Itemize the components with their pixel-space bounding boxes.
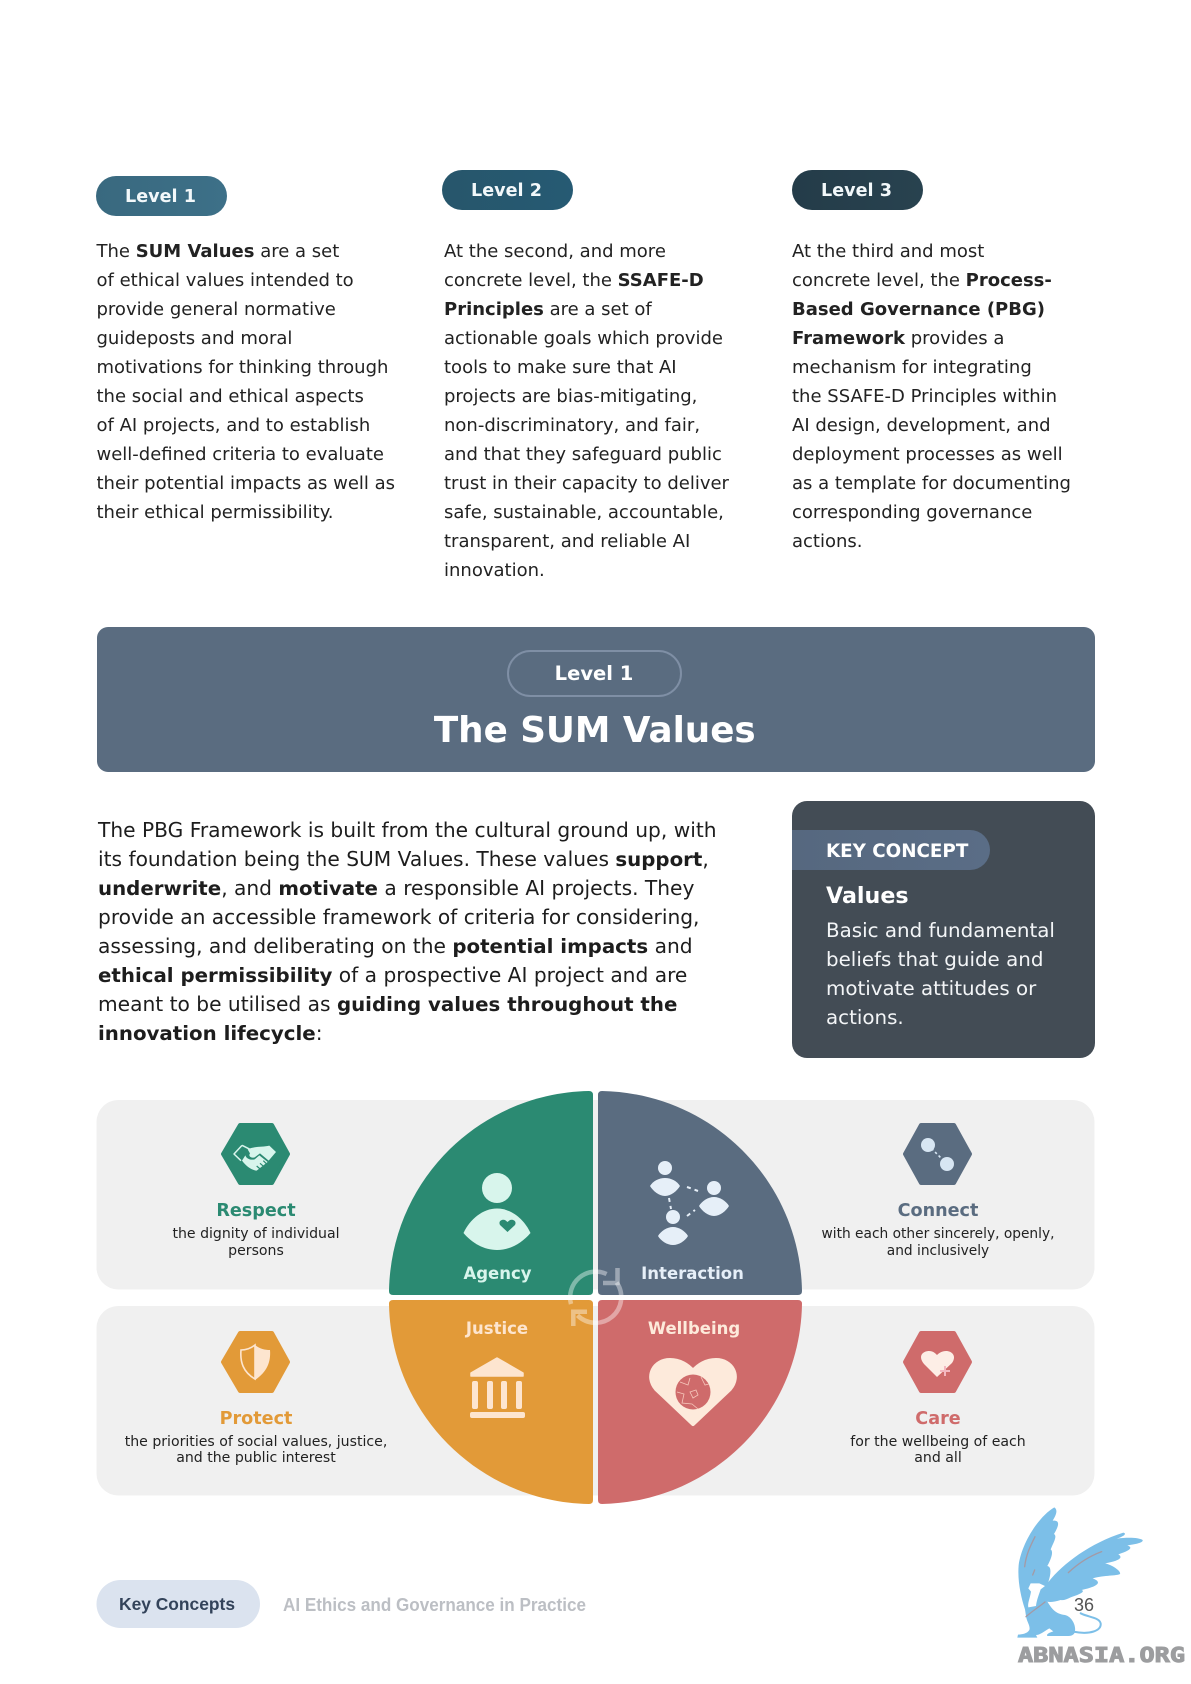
text: Level 1 description: of AI projects, and to establish — [96, 415, 370, 436]
intro paragraph: The PBG Framework is built from the cultural ground up, with — [98, 818, 717, 842]
intro paragraph: ethical permissibility of a prospective AI project and are — [98, 963, 687, 987]
pill: Level 2: Level 2 — [471, 181, 542, 201]
icon: heart with globe — [651, 1360, 735, 1424]
icon: person with heart — [464, 1173, 530, 1250]
text: Level 2 description: innovation. — [444, 560, 545, 581]
key concept definition: Basic and fundamental — [826, 919, 1055, 942]
description: Connect: with each other sincerely, openly, — [822, 1226, 1054, 1242]
quadrant: Interaction — [598, 1091, 802, 1295]
pill: Level 1 — [96, 176, 227, 216]
quadrant: Justice — [389, 1300, 593, 1504]
intro paragraph: meant to be utilised as guiding values throughout the — [98, 992, 677, 1016]
text: Level 2 description — [444, 241, 729, 581]
banner title: The SUM Values — [434, 710, 756, 751]
label: Respect: Respect — [216, 1201, 296, 1221]
footer title: AI Ethics and Governance in Practice — [283, 1594, 586, 1615]
label: Connect: Connect — [898, 1201, 978, 1221]
key concept tag: KEY CONCEPT — [826, 841, 968, 862]
label: Care: Care — [915, 1409, 961, 1429]
intro paragraph: assessing, and deliberating on the potential impacts and — [98, 934, 693, 958]
text: Level 1 description: well-defined criteria to evaluate — [96, 444, 384, 465]
text: Level 1 description: of ethical values intended to — [96, 270, 354, 291]
text: Level 3 description: as a template for documenting — [792, 473, 1071, 494]
text: Level 1 description: motivations for thinking through — [96, 357, 388, 378]
quadrant: Wellbeing — [598, 1300, 802, 1504]
intro paragraph: provide an accessible framework of criteria for considering, — [98, 905, 699, 929]
label: Protect: Protect — [220, 1409, 292, 1429]
intro paragraph: its foundation being the SUM Values. These values support, — [98, 847, 709, 871]
label: Wellbeing: Wellbeing — [648, 1319, 740, 1338]
intro paragraph: underwrite, and motivate a responsible AI projects. They — [98, 876, 694, 900]
intro paragraph — [98, 818, 717, 1045]
text: Level 2 description: and that they safeguard public — [444, 444, 722, 465]
text: Level 2 description: tools to make sure that AI — [444, 357, 677, 378]
text: Level 3 description: mechanism for integrating — [792, 357, 1032, 378]
description: Care: and all — [914, 1450, 962, 1466]
pill: Level 2 — [442, 170, 573, 210]
label: Justice: Justice — [465, 1319, 528, 1338]
footer pill: Key Concepts: Key Concepts — [119, 1594, 235, 1614]
key concept definition: actions. — [826, 1006, 904, 1029]
logo text: ABNASIA.ORG — [1018, 1643, 1185, 1667]
text: Level 2 description: transparent, and reliable AI — [444, 531, 690, 552]
page number: 36 — [1074, 1595, 1094, 1615]
banner: The SUM Values — [96, 627, 1095, 772]
key concept definition — [826, 919, 1055, 1029]
description: Protect: the priorities of social values, justice, — [125, 1434, 387, 1450]
text: Level 3 description: corresponding governance — [792, 502, 1032, 523]
key concept definition: beliefs that guide and — [826, 948, 1043, 971]
icon: handshake hexagon — [223, 1125, 288, 1183]
pill: Level 3 — [792, 170, 923, 210]
logo: griffin watermark — [1017, 1507, 1143, 1638]
text: Level 2 description: safe, sustainable, accountable, — [444, 502, 724, 523]
text: Level 2 description: non-discriminatory, and fair, — [444, 415, 700, 436]
value: Respect — [172, 1125, 340, 1259]
text: Level 1 description — [96, 241, 395, 523]
text: Level 2 description: Principles are a set of — [444, 299, 652, 320]
key concept tag — [792, 830, 990, 870]
text: Level 3 description: At the third and most — [792, 241, 984, 262]
key concept heading: Values — [826, 883, 909, 909]
text: Level 2 description: projects are bias-mitigating, — [444, 386, 697, 407]
text: Level 1 description: The SUM Values are a set — [96, 241, 339, 262]
intro paragraph: innovation lifecycle: — [98, 1021, 323, 1045]
icon: institution building — [470, 1358, 525, 1418]
text: Level 3 description: Framework provides a — [792, 328, 1004, 349]
text: Level 3 description: Based Governance (PBG) — [792, 299, 1045, 320]
description: Connect: and inclusively — [887, 1243, 989, 1259]
footer pill: Key Concepts — [96, 1580, 260, 1628]
label: Interaction: Interaction — [641, 1264, 744, 1283]
icon: connected nodes hexagon — [905, 1125, 970, 1183]
value: Care — [850, 1333, 1026, 1466]
icon: heart hexagon — [905, 1333, 970, 1391]
text: Level 2 description: actionable goals which provide — [444, 328, 723, 349]
icon: cycle arrows — [570, 1268, 621, 1326]
icon: shield hexagon — [223, 1333, 288, 1391]
text: Level 2 description: trust in their capacity to deliver — [444, 473, 729, 494]
description: Care: for the wellbeing of each — [850, 1434, 1026, 1450]
text: Level 1 description: their potential impacts as well as — [96, 473, 395, 494]
quadrant: Agency — [389, 1091, 593, 1295]
value: Protect — [125, 1333, 387, 1466]
key concept panel — [792, 801, 1095, 1058]
text: Level 3 description: concrete level, the Process- — [792, 270, 1052, 291]
key concept definition: motivate attitudes or — [826, 977, 1036, 1000]
text: Level 3 description: AI design, development, and — [792, 415, 1051, 436]
banner pill: Level 1 — [506, 650, 682, 697]
pill: Level 1: Level 1 — [125, 187, 196, 207]
pill: Level 3: Level 3 — [821, 181, 892, 201]
banner pill: Level 1: Level 1 — [555, 662, 633, 685]
description: Respect: persons — [228, 1243, 284, 1259]
text: Level 3 description — [792, 241, 1071, 552]
text: Level 1 description: their ethical permissibility. — [96, 502, 334, 523]
text: Level 1 description: the social and ethical aspects — [96, 386, 364, 407]
text: Level 3 description: deployment processes as well — [792, 444, 1063, 465]
text: Level 1 description: provide general normative — [96, 299, 336, 320]
text: Level 3 description: actions. — [792, 531, 863, 552]
text: Level 3 description: the SSAFE-D Principles within — [792, 386, 1057, 407]
label: Agency: Agency — [463, 1264, 532, 1283]
value: Connect — [822, 1125, 1054, 1259]
description: Protect: and the public interest — [176, 1450, 336, 1466]
panel: upper values background — [96, 1100, 1094, 1290]
text: Level 1 description: guideposts and moral — [96, 328, 292, 349]
icon: three connected people — [650, 1161, 729, 1245]
description: Respect: the dignity of individual — [172, 1226, 340, 1242]
text: Level 2 description: At the second, and more — [444, 241, 666, 262]
text: Level 2 description: concrete level, the SSAFE-D — [444, 270, 704, 291]
panel: lower values background — [96, 1306, 1094, 1496]
